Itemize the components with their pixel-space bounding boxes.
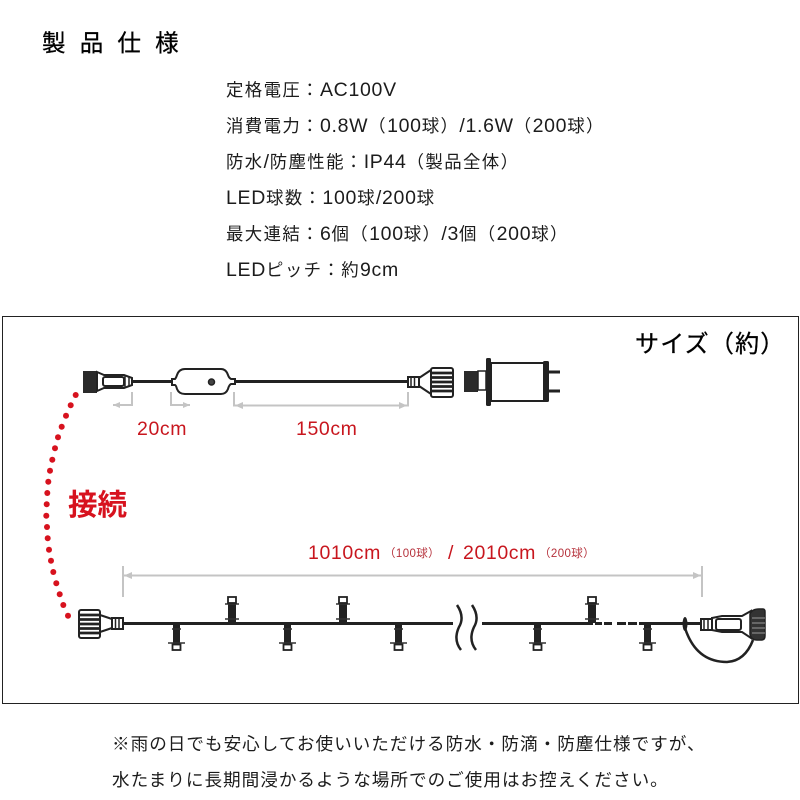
break mark [456,605,477,650]
length: 100 bulbs: 1010cm [308,542,381,564]
note: 200 bulbs: （200球） [539,548,595,560]
spec: waterproof rating: 防水/防塵性能：IP44（製品全体） [226,151,519,173]
end connector with cap strap [682,609,765,662]
panel: size diagram [2,316,799,704]
connection dotted arc [43,392,79,619]
specification list [226,79,605,281]
length: 200 bulbs: 2010cm [463,542,536,564]
light string cable [123,622,700,625]
dimension: 20cm brackets [113,392,190,408]
female connector on controller cable [83,371,132,393]
spec: power consumption: 消費電力：0.8W（100球）/1.6W（200球） [226,115,605,137]
label: total length [308,542,595,564]
controller switch box [172,369,235,394]
spec: LED count: LED球数：100球/200球 [226,187,435,209]
dashed cable section [595,622,637,625]
heading: size: サイズ（約） [635,331,785,358]
note text [112,734,706,790]
male connector on controller cable [408,368,453,397]
spec: rated voltage: 定格電圧：AC100V [226,79,397,101]
slash: / [448,542,454,564]
controller cable [132,380,408,383]
note line 1: ※雨の日でも安心してお使いいただける防水・防滴・防塵仕様ですが、 [112,734,706,754]
note: 100 bulbs: （100球） [384,548,440,560]
spec: max connection: 最大連結：6個（100球）/3個（200球） [226,223,569,245]
label: 20cm: 20cm [137,418,187,440]
LED bulbs pointing down [168,625,656,650]
label: 150cm: 150cm [296,418,358,440]
label: connection: 接続 [68,489,127,522]
spec: LED pitch: LEDピッチ：約9cm [226,259,399,281]
note line 2: 水たまりに長期間浸かるような場所でのご使用はお控えください。 [112,770,669,790]
start connector [79,610,123,638]
power adapter [464,358,560,406]
LED bulbs pointing up [225,597,599,623]
title: 製品仕様 [42,30,193,56]
dimension: total length bracket [123,566,702,597]
dimension: 150cm bracket [234,392,408,409]
